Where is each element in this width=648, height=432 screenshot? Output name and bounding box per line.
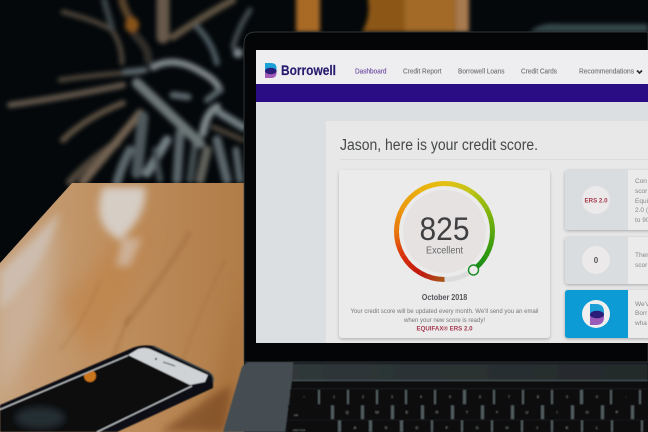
- panel: score model card: scor: [635, 188, 648, 195]
- wooden table: [0, 183, 244, 432]
- page background: [256, 102, 648, 343]
- phone white frame: [128, 348, 208, 385]
- nav links: Borrowell Loans: [458, 68, 505, 76]
- phone body: [0, 345, 213, 432]
- panel: score model card: Con: [635, 178, 647, 185]
- keyboard row 3: caps lock: [293, 428, 306, 432]
- panel: inquiries card: scor: [635, 262, 648, 269]
- phone screen: [0, 356, 188, 432]
- nav links: [355, 68, 634, 76]
- keyboard row 3: J: [536, 425, 538, 430]
- keyboard row 3: F: [446, 425, 449, 430]
- touch bar top edge: [292, 380, 648, 381]
- keyboard row 2: P: [616, 410, 619, 414]
- panel: score model card: 2.0 (: [635, 207, 648, 214]
- keyboard row 2: R: [436, 410, 439, 414]
- heading divider: [340, 159, 648, 160]
- keyboard row 2: Y: [496, 410, 499, 414]
- keyboard row 2: tab: [294, 413, 298, 417]
- keyboard well: [285, 380, 648, 432]
- nav links: Credit Report: [403, 68, 442, 76]
- keyboard row 1: 7: [508, 395, 510, 399]
- keyboard row 3: K: [566, 425, 569, 430]
- purple banner: [256, 84, 648, 102]
- nav links: Credit Cards: [521, 68, 557, 76]
- nav links: Dashboard: [355, 68, 387, 76]
- score: 825: [420, 211, 470, 247]
- keyboard row 2: Q: [345, 410, 349, 414]
- keyboard row 1: 1: [333, 395, 335, 399]
- keyboard row 3: D: [416, 425, 419, 430]
- panel: inquiries card: 0: [594, 256, 599, 265]
- date: October 2018: [422, 292, 467, 302]
- panel: Borrowell message card: wha: [634, 320, 647, 327]
- background: blurred potted plant: [10, 0, 250, 182]
- keyboard row 1: ~: [303, 395, 305, 399]
- keyboard row 3: [287, 420, 648, 432]
- keyboard row 1: 0: [596, 395, 598, 399]
- icon: chevron: [637, 70, 642, 73]
- keyboard row 2: O: [585, 410, 589, 414]
- panel: score model card: Equi: [635, 198, 648, 205]
- key gap bands: [287, 390, 648, 432]
- keyboard row 3: H: [506, 425, 509, 430]
- phone white side lines: [0, 356, 192, 432]
- panel: credit score gauge card: [339, 170, 550, 340]
- background: blurred chairs: [296, 0, 648, 32]
- main card background: [326, 121, 648, 343]
- panel: inquiries card: [565, 237, 648, 285]
- panel: Borrowell message card: [565, 290, 648, 339]
- phone screen reflection: [14, 370, 96, 430]
- laptop base: [223, 362, 648, 432]
- keyboard row 2: E: [406, 410, 409, 414]
- navigation bar: [256, 50, 648, 84]
- bureau label: EQUIFAX® ERS 2.0: [416, 324, 473, 332]
- keyboard row 1: 3: [391, 395, 393, 399]
- phone: [0, 345, 213, 432]
- panel: Borrowell message card: Borr: [635, 310, 648, 317]
- keyboard row 3: L: [596, 425, 599, 430]
- keyboard row 3: S: [385, 425, 388, 430]
- keyboard row 1: 4: [420, 395, 422, 399]
- laptop lid bezel: [244, 32, 648, 362]
- phone top edge highlight: [153, 346, 213, 382]
- icon: Borrowell logo: [265, 63, 277, 78]
- panel: score model card: [565, 170, 648, 231]
- keyboard row 2: I: [556, 410, 558, 414]
- update note: Your credit score will be updated every month. We'll send you an email: [350, 308, 539, 315]
- keyboard row 3: G: [475, 425, 479, 430]
- score rating: Excellent: [426, 244, 463, 256]
- phone camera and earpiece: [155, 358, 157, 360]
- keyboard row 1: 6: [479, 395, 481, 399]
- panel: score model card: ERS 2.0: [584, 198, 608, 204]
- hinge strip: [292, 363, 648, 380]
- touch bar: [291, 381, 648, 388]
- keyboard row 2: T: [466, 410, 469, 414]
- keyboard row 2: U: [526, 410, 529, 414]
- panel: inquiries card: Ther: [635, 252, 648, 259]
- phone orange reflection: [84, 370, 96, 382]
- keyboard row 2: [288, 405, 648, 420]
- gauge handle: [468, 265, 478, 275]
- keyboard row 1: 9: [566, 395, 568, 399]
- update note: [350, 308, 539, 324]
- keyboard row 1: 2: [362, 395, 364, 399]
- update note: when your new score is ready!: [403, 317, 485, 324]
- logo wordmark: Borrowell: [281, 63, 336, 78]
- icon: Borrowell mark: [590, 304, 604, 325]
- laptop screen: [256, 50, 648, 343]
- keyboard row 3: A: [354, 425, 357, 430]
- main card heading: Jason, here is your credit score.: [340, 137, 538, 154]
- keyboard row 1: 5: [449, 395, 451, 399]
- keyboard row 1: -: [625, 395, 627, 399]
- keyboard row 2: W: [375, 410, 379, 414]
- nav links: Recommendations: [579, 68, 634, 76]
- keyboard row 1: 8: [537, 395, 539, 399]
- keyboard row 1: [290, 390, 648, 404]
- gauge: [396, 183, 493, 280]
